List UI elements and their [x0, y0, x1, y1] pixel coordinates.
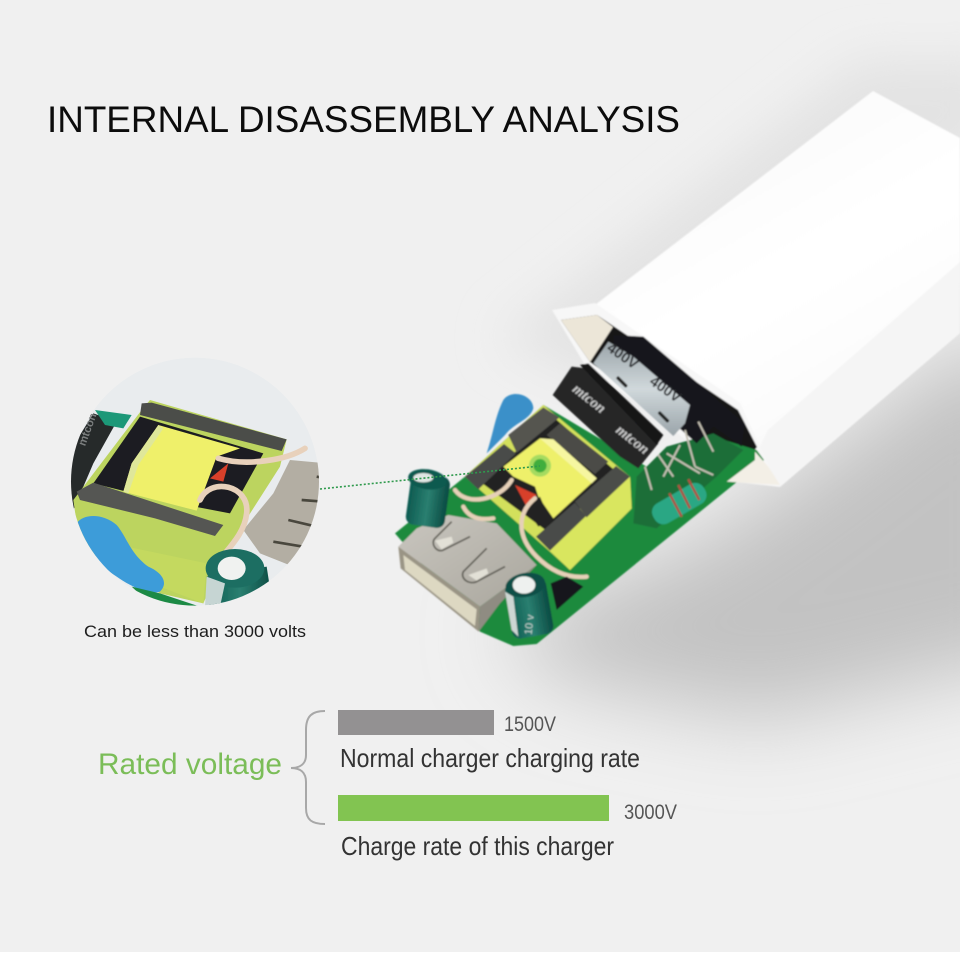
transformer wires	[455, 480, 587, 577]
circle background	[122, 414, 124, 428]
label: this charger: Charge rate of this charger	[341, 831, 614, 861]
capacitor mtcon	[553, 363, 663, 468]
capacitor 400V: 400V	[604, 340, 641, 373]
magnified circle	[71, 400, 319, 606]
case opening	[561, 315, 757, 462]
dotted connector line	[320, 466, 540, 489]
label: normal charger: Normal charger charging rate	[340, 743, 640, 773]
black chip	[551, 577, 583, 610]
bar: this charger: 3000V	[624, 801, 677, 824]
capacitor mtcon: mtcon	[569, 381, 609, 417]
bar: normal charger: 1500V	[504, 713, 556, 736]
USB port	[398, 515, 537, 632]
green board	[132, 586, 198, 606]
transformer body	[73, 400, 287, 603]
capacitor 400V	[593, 335, 745, 447]
inductor	[648, 479, 710, 528]
teal capacitor	[205, 549, 269, 606]
blue capacitor	[77, 516, 164, 593]
charger illustration	[395, 91, 960, 646]
title: INTERNAL DISASSEMBLY ANALYSIS	[47, 99, 680, 140]
circle caption: Can be less than 3000 volts	[84, 622, 306, 641]
capacitor mtcon: mtcon	[613, 422, 652, 458]
USB metal	[244, 460, 319, 564]
component pins	[645, 422, 713, 490]
green inductor	[95, 410, 132, 428]
case lower rim	[727, 452, 780, 485]
brace	[291, 711, 325, 824]
transformer	[465, 405, 632, 570]
capacitor 400V: 400V	[646, 374, 684, 406]
circuit board assembly	[395, 335, 780, 646]
capacitor top left	[405, 467, 451, 529]
green marker dot	[529, 455, 551, 477]
blue safety capacitor	[487, 394, 533, 453]
charger case	[552, 91, 960, 487]
capacitor bottom: 10 v	[523, 613, 537, 635]
capacitor bottom	[504, 570, 555, 640]
black capacitor	[71, 413, 114, 508]
soft shadows behind the charger	[500, 60, 960, 720]
circuit board	[395, 405, 764, 646]
yellow coil	[123, 425, 240, 511]
wires	[200, 448, 305, 553]
bar: normal charger	[338, 710, 556, 736]
rated voltage label: Rated voltage	[98, 748, 282, 781]
magnified circle: mtcon	[77, 412, 99, 448]
bar: this charger	[338, 795, 677, 824]
transformer coil	[503, 438, 597, 518]
